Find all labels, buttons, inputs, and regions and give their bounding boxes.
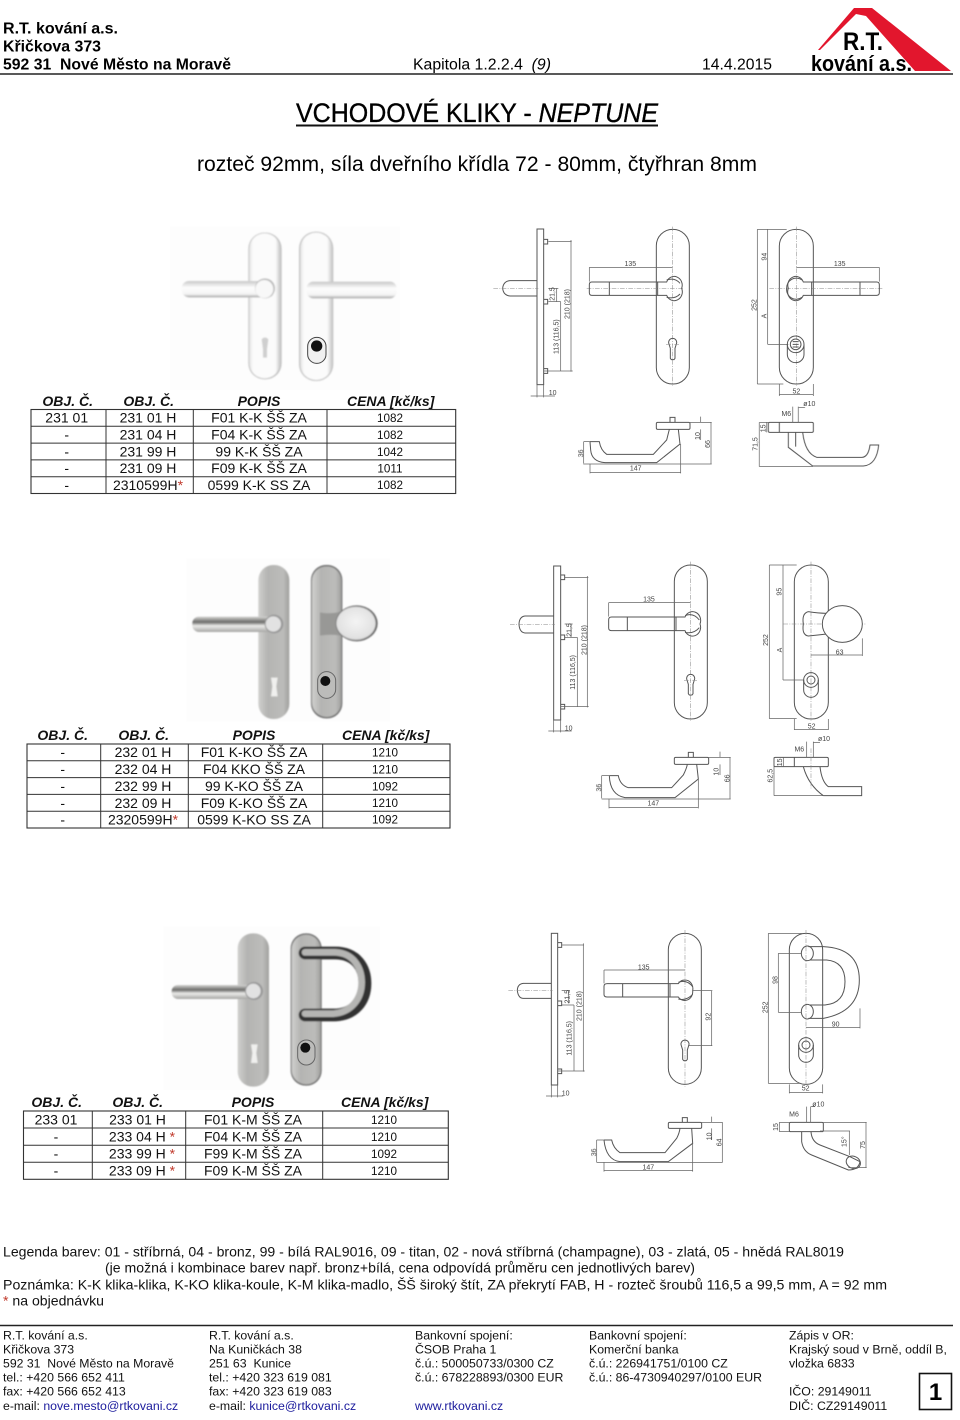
footer: company registration: IČO: 29149011 [789,1384,872,1398]
table: 232 prices: POPIS [233,727,276,743]
footer: Kunice office: Na Kuničkách 38 [209,1342,302,1356]
technical drawing: K-M dimensions: 135 [638,964,650,971]
table: 233 prices: 233 01 H [109,1112,166,1128]
footer: Komerční banka details [589,1328,762,1384]
table: 233 prices: F01 K-M ŠŠ ZA [204,1112,303,1128]
footer: company registration [789,1328,947,1413]
footer: Komerční banka details: Bankovní spojení: [589,1328,687,1342]
footer: ČSOB bank details: č.ú.: 678228893/0300 EUR [415,1370,563,1384]
footer: Komerční banka details: Komerční banka [589,1342,679,1356]
cylinder cover [308,337,326,363]
technical drawing: K-M dimensions: 98 [772,976,779,984]
table: 231 prices: - [64,426,69,442]
legend and notes [3,1244,887,1308]
table: 232 prices: - [60,778,65,794]
table: 231 prices: - [64,477,69,493]
technical drawing: K-K dimensions: 15 [761,424,768,432]
footer: Kunice office: e-mail: kunice@rtkovani.cz [209,1399,356,1413]
table: 232 prices: 1092 [372,780,398,794]
footer: ČSOB bank details: www.rtkovani.cz [414,1399,503,1413]
table: 231 prices: F04 K-K ŠŠ ZA [211,426,308,442]
technical drawing: K-K dimensions: 210 (218) [565,289,572,319]
footer: Kunice office: R.T. kování a.s. [209,1328,294,1342]
technical drawing: K-K dimensions: 147 [630,466,642,473]
technical drawing: K-M dimensions: 52 [802,1086,810,1093]
technical drawing: K-KO dimensions: 62,5 [768,769,775,782]
footer: Kunice office: tel.: +420 323 619 081 [209,1370,332,1384]
footer: Nové Město office: R.T. kování a.s. [3,1328,88,1342]
technical drawing: K-K dimensions: 10 [549,390,557,397]
legend and notes: Legenda barev: 01 - stříbrná, 04 - bronz, 99 - bílá RAL9016, 09 - titan, 02 - nová stříbrná (champagne), 03 - zlatá, 05 - hnědá RAL8019 [3,1244,844,1260]
table: 231 prices: 231 09 H [120,460,176,476]
table: 233 prices: 1210 [371,1114,397,1127]
table: 233 prices: 233 09 H * [109,1162,176,1178]
footer: Kunice office [209,1328,356,1413]
technical drawing: K-K dimensions: 36 [578,449,585,457]
technical drawing: K-M dimensions: 36 [591,1148,598,1156]
table: 231 prices: POPIS [238,393,281,409]
technical drawing: K-M dimensions: 113 (116,5) [567,1021,574,1056]
header: company address [3,20,231,74]
table: 231 prices: 1082 [377,429,403,442]
table: 233 prices: 233 99 H * [109,1146,176,1162]
header: company address: 592 31 Nové Město na Moravě [3,56,231,74]
table: 232 prices: 1092 [372,814,398,826]
technical drawing: K-K dimensions: M6 [781,411,791,418]
table: 233 prices: 233 01 [35,1112,78,1128]
table: 231 prices [31,392,456,494]
table: 232 prices: F01 K-KO ŠŠ ZA [201,744,308,760]
table: 231 prices: OBJ. Č. [42,392,93,409]
technical drawing: K-M dimensions: 21,5 [565,990,572,1003]
table: 231 prices: 231 04 H [120,426,176,442]
cylinder cover [318,672,336,698]
technical drawing: K-K dimensions: 52 [792,389,800,396]
footer: company registration: Zápis v OR: [789,1328,854,1342]
table: 232 prices: F09 K-KO ŠŠ ZA [201,795,308,811]
footer: Nové Město office: fax: +420 566 652 413 [3,1384,126,1398]
technical drawing: K-M dimensions: 15 [773,1123,780,1131]
technical drawing: K-M dimensions: 10 [706,1132,713,1140]
technical drawing: K-KO dimensions: 95 [777,588,784,596]
page number box [920,1374,952,1410]
table: 231 prices: 1082 [377,479,403,492]
technical drawing: K-M dimensions: 64 [716,1138,723,1146]
table: 231 prices: 0599 K-K SS ZA [208,477,311,493]
header: chapter reference: Kapitola 1.2.2.4 (9) [413,56,551,74]
technical drawing: K-KO dimensions: A [777,647,784,652]
logo: R.T. kování a.s.: kování a.s. [811,51,912,76]
table: 232 prices: - [60,761,65,777]
page number box: 1 [929,1379,942,1406]
table: 232 prices: - [60,812,65,828]
table: 233 prices: OBJ. Č. [31,1093,82,1110]
technical drawing: K-KO dimensions: 252 [763,634,770,646]
technical drawing: K-KO dimensions: 113 (116,5) [570,655,577,690]
table: 233 prices: CENA [kč/ks] [341,1094,430,1110]
technical drawing: K-M dimensions [508,930,867,1172]
technical drawing: K-KO dimensions: 21,5 [567,623,574,637]
table: 232 prices: OBJ. Č. [37,726,88,743]
technical drawing: K-KO dimensions [510,562,866,808]
table: 231 prices: - [64,444,69,460]
table: 233 prices: F04 K-M ŠŠ ZA [204,1128,303,1144]
table: 233 prices: 233 04 H * [109,1128,176,1144]
technical drawing: K-K dimensions: 135 [625,261,636,268]
technical drawing: K-M dimensions: 92 [706,1013,713,1021]
technical drawing: K-KO dimensions: 10 [565,726,573,733]
footer: Kunice office: 251 63 Kunice [209,1356,291,1370]
technical drawing: K-K dimensions: 21,5 [549,287,556,301]
photo: silver handle with knob [187,558,390,722]
header: company address: Křičkova 373 [3,38,101,56]
panel: product 233 K-M [24,927,867,1179]
table: 233 prices: - [54,1162,59,1178]
technical drawing: K-M dimensions: 252 [762,1001,769,1013]
footer: Nové Město office: 592 31 Nové Město na Moravě [3,1356,174,1370]
legend and notes: Poznámka: K-K klika-klika, K-KO klika-koule, K-M klika-madlo, ŠŠ široký štít, ZA překrytí FAB, H - rozteč šroubů 116,5 a 99,5 mm, A = 92 mm [3,1276,887,1292]
table: 232 prices [27,726,450,828]
technical drawing: K-M dimensions: 90 [832,1021,840,1028]
technical drawing: K-M dimensions: 210 (218) [577,991,584,1021]
footer: ČSOB bank details: ČSOB Praha 1 [415,1342,496,1356]
table: 232 prices: 232 99 H [115,778,171,794]
legend and notes: * na objednávku [3,1292,104,1308]
cylinder cover [298,1040,315,1065]
table: 231 prices: - [64,460,69,476]
table: 231 prices: 1042 [377,446,403,459]
technical drawing: K-KO dimensions: 36 [596,784,603,792]
table: 231 prices: 99 K-K ŠŠ ZA [215,444,303,460]
table: 232 prices: CENA [kč/ks] [342,727,431,743]
table: 231 prices: 231 01 H [120,410,176,426]
footer: Komerční banka details: č.ú.: 226941751/0100 CZ [589,1356,728,1370]
table: 232 prices: F04 KKO ŠŠ ZA [203,761,306,777]
table: 231 prices: 231 99 H [120,444,176,460]
legend and notes: (je možná i kombinace barev např. bronz+bílá, cena odpovídá průměru cen jednotlivých barev) [105,1260,695,1276]
table: 231 prices: 2310599H* [113,477,184,493]
footer: ČSOB bank details [414,1328,563,1413]
table: 232 prices: 232 04 H [115,761,171,777]
technical drawing: K-K dimensions: 135 [834,261,846,268]
technical drawing: K-K dimensions: A [762,313,769,318]
technical drawing: K-KO dimensions: ø10 [818,736,830,743]
table: 231 prices: 1082 [377,412,403,425]
table: 232 prices: - [60,795,65,811]
technical drawing: K-K dimensions: 252 [752,299,759,311]
footer: company registration: Krajský soud v Brně, oddíl B, [789,1342,947,1356]
footer: Nové Město office: Křičkova 373 [3,1342,74,1356]
table: 232 prices: 99 K-KO ŠŠ ZA [205,778,304,794]
technical drawing: K-KO dimensions: 52 [808,724,816,731]
table: 233 prices: OBJ. Č. [112,1093,163,1110]
technical drawing: K-K dimensions: 10 [695,432,702,440]
footer: Nové Město office: tel.: +420 566 652 411 [3,1370,125,1384]
footer: Kunice office: fax: +420 323 619 083 [209,1384,332,1398]
technical drawing: K-K dimensions: 113 (116,5) [553,319,560,354]
footer: company registration: vložka 6833 [789,1356,855,1370]
technical drawing: K-M dimensions: 147 [643,1164,654,1171]
technical drawing: K-KO dimensions: 10 [714,768,721,776]
technical drawing: K-K dimensions [493,227,883,473]
logo: R.T. kování a.s.: R.T. [843,28,883,56]
table: 233 prices: 1210 [371,1165,397,1178]
footer: Nové Město office: e-mail: nove.mesto@rtkovani.cz [3,1399,178,1413]
table: 231 prices: 1011 [377,462,403,476]
table: 232 prices: 1210 [372,764,398,776]
table: 231 prices: 231 01 [45,410,88,426]
technical drawing: K-M dimensions: 15° [841,1136,849,1147]
technical drawing: K-KO dimensions: 147 [648,801,659,808]
table: 232 prices: OBJ. Č. [118,726,169,743]
footer: Komerční banka details: č.ú.: 86-4730940297/0100 EUR [589,1370,762,1384]
subtitle: rozteč 92mm, síla dveřního křídla 72 - 80mm, čtyřhran 8mm [197,152,757,176]
technical drawing: K-KO dimensions: 135 [643,597,655,604]
technical drawing: K-M dimensions: 10 [562,1090,570,1097]
technical drawing: K-KO dimensions: 210 (218) [581,625,588,655]
technical drawing: K-KO dimensions: 66 [724,774,731,782]
footer: ČSOB bank details: Bankovní spojení: [415,1328,513,1342]
table: 233 prices: 1092 [371,1148,397,1161]
technical drawing: K-M dimensions: 75 [860,1141,867,1149]
panel: product 231 K-K [31,227,883,494]
table: 233 prices: F09 K-M ŠŠ ZA [204,1162,303,1178]
table: 232 prices: 1210 [372,746,398,760]
table: 233 prices [24,1093,448,1179]
header: date: 14.4.2015 [702,56,772,74]
technical drawing: K-M dimensions: ø10 [812,1101,824,1108]
footer: company registration: DIČ: CZ29149011 [789,1398,887,1413]
table: 232 prices: 232 09 H [115,795,171,811]
table: 231 prices: F01 K-K ŠŠ ZA [211,410,308,426]
footer: Nové Město office [3,1328,178,1413]
technical drawing: K-KO dimensions: 63 [836,649,844,656]
table: 232 prices: 2320599H* [108,812,179,828]
panel: product 232 K-KO [27,558,866,828]
table: 232 prices: 0599 K-KO SS ZA [197,812,311,828]
table: 233 prices: 1210 [371,1131,397,1144]
footer: ČSOB bank details: č.ú.: 500050733/0300 CZ [415,1356,554,1370]
photo: white handle set [170,227,400,390]
technical drawing: K-K dimensions: 71,5 [753,437,760,451]
photo: silver handle with D grip [163,927,380,1090]
table: 231 prices: F09 K-K ŠŠ ZA [211,460,308,476]
technical drawing: K-K dimensions: 66 [705,440,712,448]
logo: R.T. kování a.s. [811,8,951,76]
header: company address: R.T. kování a.s. [3,20,118,38]
technical drawing: K-K dimensions: ø10 [803,401,815,408]
table: 231 prices: CENA [kč/ks] [347,393,436,409]
title: VCHODOVÉ KLIKY - NEPTUNE [296,98,659,128]
table: 232 prices: - [60,744,65,760]
technical drawing: K-KO dimensions: M6 [794,747,804,754]
technical drawing: K-KO dimensions: 15 [777,758,784,766]
table: 233 prices: POPIS [232,1094,275,1110]
table: 232 prices: 232 01 H [115,744,171,760]
table: 232 prices: 1210 [372,797,398,810]
technical drawing: K-M dimensions: M6 [789,1111,799,1118]
table: 233 prices: - [54,1128,59,1144]
table: 233 prices: - [54,1146,59,1162]
technical drawing: K-K dimensions: 94 [762,253,769,261]
table: 231 prices: OBJ. Č. [123,392,174,409]
table: 233 prices: F99 K-M ŠŠ ZA [204,1146,303,1162]
